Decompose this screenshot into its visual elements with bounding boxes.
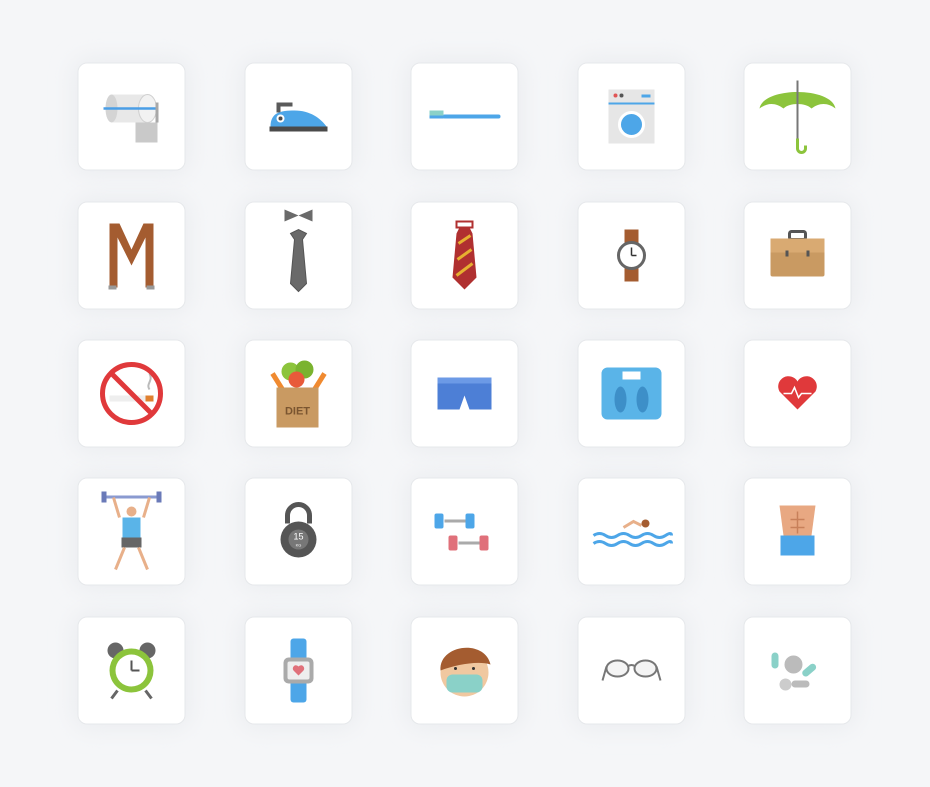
- card: kettlebell: [238, 472, 358, 592]
- card: alarm clock: [72, 610, 192, 730]
- card: washing machine: [572, 56, 692, 176]
- card: glasses: [572, 610, 692, 730]
- card: iron: [238, 56, 358, 176]
- card: bow tie and tie: [238, 196, 358, 316]
- card: smartwatch: [238, 610, 358, 730]
- card: heart: [738, 334, 858, 454]
- card: face with mask: [404, 610, 524, 730]
- card: briefcase: [738, 196, 858, 316]
- card: no smoking: [72, 334, 192, 454]
- card: kettlebell: 15: [293, 532, 304, 542]
- card: wristwatch: [572, 196, 692, 316]
- card: suspenders: [72, 196, 192, 316]
- card: umbrella: [738, 56, 858, 176]
- card: diet bag: DIET: [285, 406, 310, 418]
- card: red tie: [404, 196, 524, 316]
- card: pills: [738, 610, 858, 730]
- card: swimmer: [572, 472, 692, 592]
- card: bathroom scale: [572, 334, 692, 454]
- card: diet bag: [238, 334, 358, 454]
- card: weightlifter: [72, 472, 192, 592]
- card: dumbbells: [404, 472, 524, 592]
- card: kettlebell: KG: [296, 542, 301, 548]
- card: toothbrush: [404, 56, 524, 176]
- card: boxers: [404, 334, 524, 454]
- card: torso: [738, 472, 858, 592]
- card: toilet paper: [72, 56, 192, 176]
